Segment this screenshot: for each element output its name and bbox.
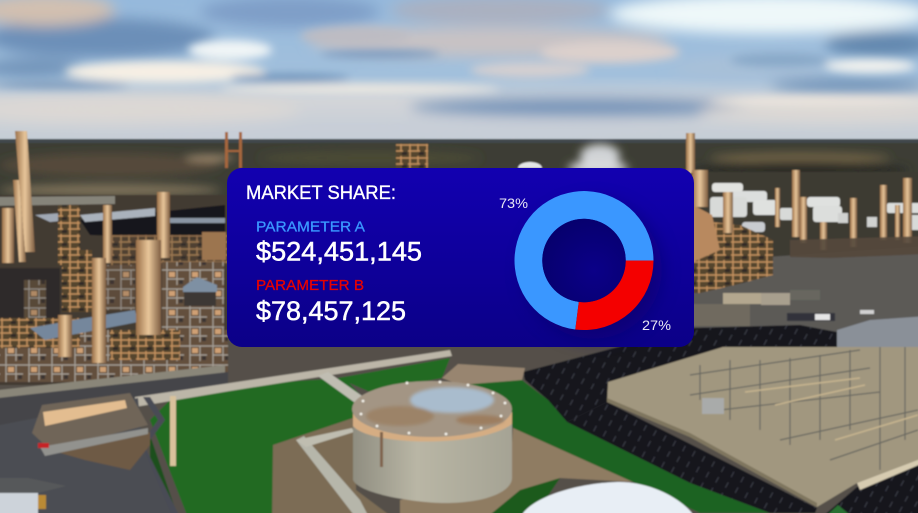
lawn xyxy=(150,358,860,513)
donut hole shading xyxy=(542,219,626,302)
label 73%: 73% xyxy=(499,195,528,211)
label 27%: 27% xyxy=(642,317,671,333)
substation concrete pad xyxy=(607,347,918,513)
panel: market share card xyxy=(227,168,694,347)
sky with clouds xyxy=(0,0,918,145)
right refinery block with white tanks xyxy=(692,170,918,293)
industrial ground xyxy=(0,195,918,513)
right lot, small buildings and cars xyxy=(690,290,918,347)
right parking lot xyxy=(523,325,837,422)
road debris and building xyxy=(0,478,66,513)
pipe rack post xyxy=(170,396,176,466)
segment: parameter A 73% xyxy=(515,191,654,330)
white tank, bottom edge xyxy=(523,482,692,513)
columns xyxy=(15,131,35,252)
parameter A value: $524,451,145 xyxy=(256,236,422,266)
parameter B label: PARAMETER B xyxy=(256,277,364,294)
lower-left processing unit xyxy=(32,393,150,470)
donut chart xyxy=(499,191,671,339)
pipe racks xyxy=(135,350,452,513)
top centre structures and steam xyxy=(396,133,695,175)
distant tree line and fields xyxy=(0,139,918,209)
dirt around tank xyxy=(272,364,633,513)
parameter A label: PARAMETER A xyxy=(256,218,365,236)
storage tank xyxy=(352,381,512,503)
parameter B value: $78,457,125 xyxy=(256,296,406,326)
left refinery block xyxy=(0,131,242,427)
lower-left road xyxy=(0,398,175,513)
segment: parameter B 27% xyxy=(575,260,654,330)
heading: MARKET SHARE: xyxy=(246,182,396,204)
